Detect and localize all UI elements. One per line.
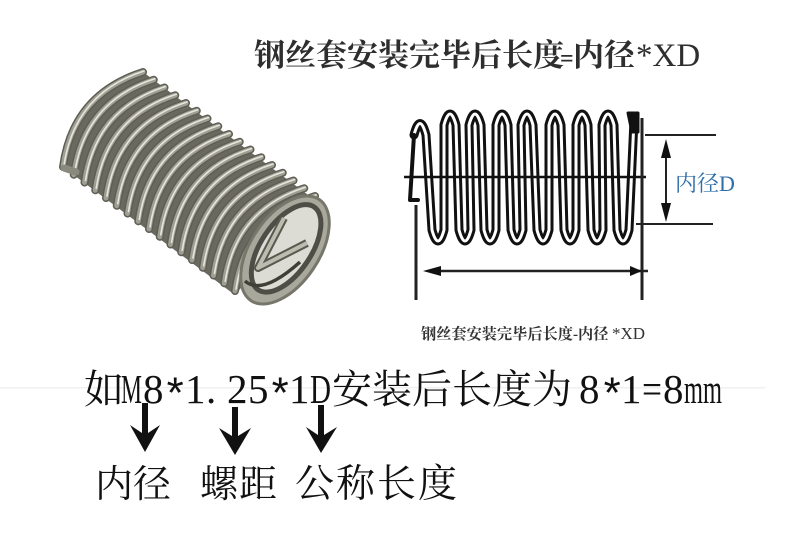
length arrow xyxy=(423,266,648,276)
formula example text: 1 xyxy=(621,366,642,412)
diagram: spring cross-section with dimensions xyxy=(404,113,735,300)
arrow: to inner diameter xyxy=(130,403,160,452)
formula example text: 8 xyxy=(579,366,600,412)
formula example text: 1 xyxy=(289,366,310,412)
label: nominal length: 公称长度 xyxy=(295,453,457,509)
label: inner diameter D: 内径D xyxy=(675,171,735,196)
inner triangular wire xyxy=(258,218,307,268)
centre line xyxy=(404,176,646,178)
coils xyxy=(410,113,638,241)
left extension line xyxy=(414,205,418,300)
end face of coil xyxy=(223,180,347,320)
formula example text: 安装后长度为 xyxy=(332,358,572,415)
photo: steel wire thread insert xyxy=(63,71,347,320)
formula example text xyxy=(84,358,722,423)
formula example text: * xyxy=(162,373,188,423)
label: pitch: 螺距 xyxy=(200,453,277,508)
formula example text: = xyxy=(642,366,662,412)
formula example text: 8 xyxy=(663,366,684,412)
title: 钢丝套安装完毕后长度 xyxy=(254,38,564,73)
diagram caption: -内径 xyxy=(573,325,609,343)
diagram caption: *XD xyxy=(612,324,645,343)
title xyxy=(254,38,700,74)
right extension line xyxy=(640,118,644,300)
title: = xyxy=(560,46,574,72)
arrow: to pitch xyxy=(219,407,251,455)
formula example text: 如 xyxy=(84,358,124,415)
formula example text: mm xyxy=(684,366,722,412)
formula example text: M xyxy=(121,366,142,412)
formula example text: 1.25 xyxy=(185,366,268,412)
formula example text: * xyxy=(599,373,625,423)
title: 内径 xyxy=(573,38,636,73)
label: inner diameter: 内径 xyxy=(95,453,171,508)
formula example text: D xyxy=(310,366,331,412)
arrow: to nominal length xyxy=(306,405,337,453)
title: *XD xyxy=(636,38,700,74)
inner diameter dimension lines xyxy=(636,135,716,224)
icon: coil tang on left end xyxy=(64,168,76,172)
formula example text: * xyxy=(267,373,293,423)
diagram caption: 钢丝套安装完毕后长度 xyxy=(421,325,573,343)
formula example text: 8 xyxy=(143,366,164,412)
dimension arrowheads xyxy=(661,139,671,222)
diagram caption xyxy=(421,324,645,343)
